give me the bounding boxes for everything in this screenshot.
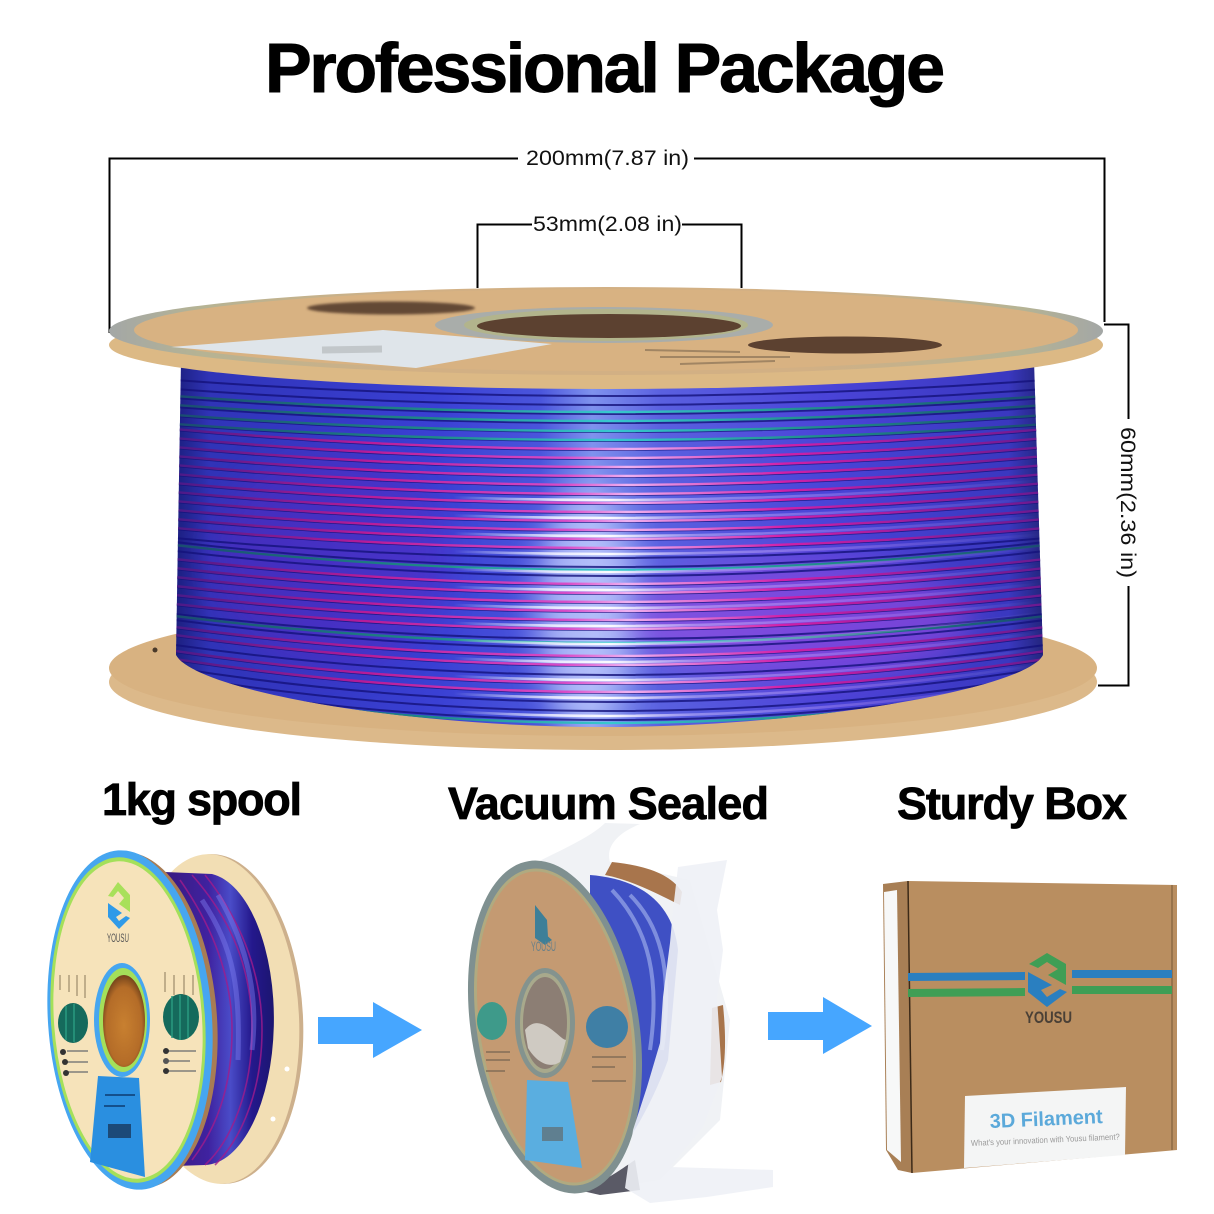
rear flange right	[710, 1005, 725, 1085]
rear flange top	[605, 862, 682, 905]
green stripes	[908, 986, 1172, 997]
left window	[58, 1003, 88, 1043]
main spool photo	[109, 287, 1103, 750]
dimension: spool height 60mm: 60mm(2.36 in)	[1116, 427, 1139, 578]
right window	[748, 336, 942, 354]
bottom flange	[109, 600, 1097, 750]
right window	[163, 994, 199, 1040]
paper label	[171, 330, 552, 368]
rear flange	[122, 850, 312, 1188]
blue label	[525, 1080, 582, 1168]
brand text: YOUSU	[531, 938, 556, 954]
filament winding	[170, 355, 1050, 735]
filament side	[165, 872, 274, 1166]
magenta strands	[175, 429, 1045, 692]
plastic behind	[530, 823, 730, 1190]
printed marks	[486, 1052, 626, 1081]
heading: sturdy box: Sturdy Box	[897, 778, 1127, 829]
blue label	[90, 1076, 145, 1177]
arrow 2	[768, 997, 872, 1054]
teal strands	[175, 396, 1045, 723]
heading: vacuum sealed: Vacuum Sealed	[448, 778, 769, 829]
heading: 1kg spool: 1kg spool	[102, 774, 302, 825]
logo	[535, 905, 552, 945]
front disc	[36, 845, 229, 1195]
hub hole	[477, 314, 741, 338]
title: Professional Package	[265, 29, 945, 107]
white label	[964, 1087, 1126, 1168]
highlight strands	[458, 482, 1019, 718]
front disc	[446, 848, 664, 1206]
label tagline: What's your innovation with Yousu filament?	[971, 1131, 1120, 1148]
box side	[883, 881, 912, 1173]
right window	[586, 1006, 628, 1048]
hub hole	[94, 963, 150, 1077]
1kg spool photo	[36, 845, 312, 1195]
dimension: hub diameter 53mm	[478, 213, 742, 288]
label heading: 3D Filament	[989, 1106, 1103, 1133]
dimension: spool width 200mm	[110, 147, 1104, 333]
brand text: YOUSU	[107, 931, 129, 945]
dimension: spool height 60mm	[1098, 324, 1139, 686]
box front	[908, 881, 1177, 1173]
blue stripes	[908, 970, 1172, 981]
top flange hub ring	[435, 307, 773, 343]
dimension: hub diameter 53mm: 53mm(2.08 in)	[533, 213, 682, 236]
plastic wrap front	[625, 860, 773, 1203]
vacuum sealed spool photo	[446, 823, 773, 1206]
sturdy box photo	[883, 881, 1177, 1173]
brand text: YOUSU	[1025, 1008, 1072, 1027]
hub hole	[515, 968, 575, 1078]
arrow 1	[318, 1002, 422, 1058]
filament under wrap	[590, 875, 678, 1185]
top flange	[109, 287, 1103, 389]
left window	[477, 1002, 507, 1040]
logo	[1028, 953, 1067, 1007]
strand separators	[175, 380, 1045, 720]
dimension: spool width 200mm: 200mm(7.87 in)	[526, 147, 689, 170]
logo	[108, 882, 130, 929]
printed marks	[645, 350, 790, 364]
dark shadow below disc	[578, 1160, 640, 1195]
left window	[307, 302, 475, 314]
tick marks and social icons	[60, 972, 193, 998]
